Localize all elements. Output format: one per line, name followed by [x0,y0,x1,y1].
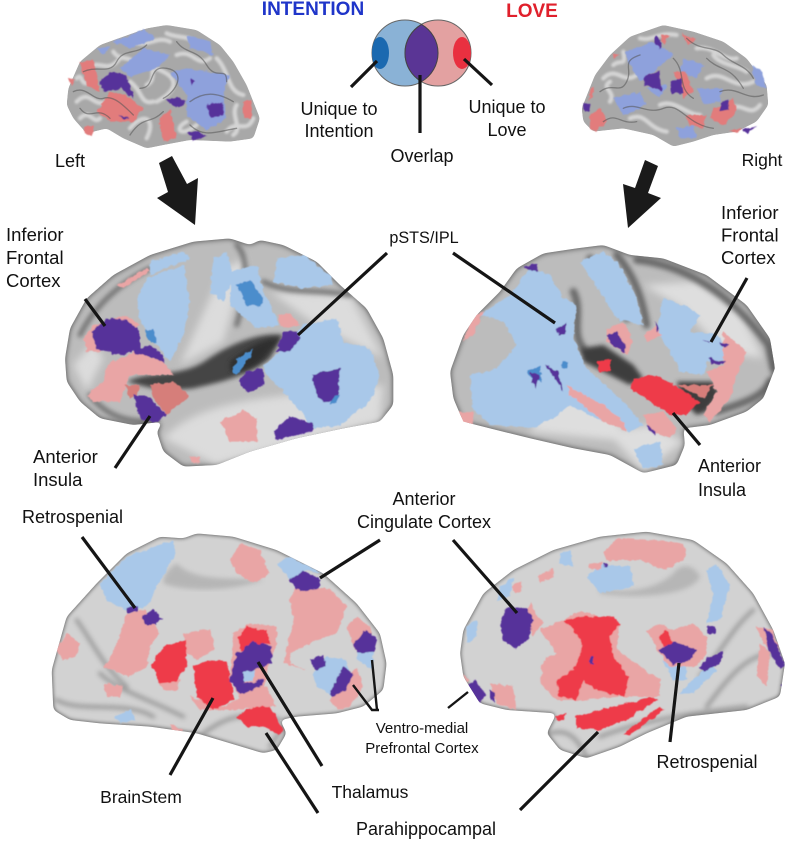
small brain: left [67,25,260,148]
label: inferior frontal cortex left: Cortex [6,270,61,291]
label: brainstem: BrainStem [100,787,182,807]
pointer: pSTS left [298,253,387,335]
label: thalamus: Thalamus [332,782,409,802]
heading: love: LOVE [506,1,558,22]
label: anterior insula left: Insula [33,469,83,490]
label: overlap: Overlap [390,146,454,166]
pointer: anterior cingulate left [320,540,380,578]
inflated brain: right medial [460,532,785,758]
label: parahippocampal: Parahippocampal [356,819,496,839]
pointer: anterior cingulate right [453,540,517,613]
label: unique to love: Love [487,120,527,140]
label: unique to intention: Intention [304,121,374,141]
shading: sulci [550,566,773,757]
shading: gyri and sulci [73,245,383,465]
pointer: retrospenial left [82,537,135,608]
pointer: parahippocampal right [520,732,598,810]
label: unique to love: Unique to [468,97,546,117]
pointer: vmPFC upper [372,660,377,710]
pointer: vmPFC right [448,692,468,708]
pointer: brainstem [170,698,213,775]
arrow: left [157,156,198,225]
pointer: anterior insula left [115,416,150,468]
label: unique to intention: Unique to [300,99,378,119]
inflated brain: left lateral [65,238,393,467]
pointer: parahippocampal left [266,733,318,813]
label: anterior insula left: Anterior [33,446,98,467]
inflated brain: right lateral [450,245,775,473]
label: inferior frontal cortex right: Inferior [721,202,779,223]
pointer: inferior frontal right [711,278,747,342]
pointer: pSTS right [453,253,555,323]
small brain: right [582,25,768,147]
pointer: vmPFC lower [353,685,379,710]
pointer: inferior frontal left [85,299,105,326]
shading: gyri and sulci [530,255,773,472]
label: anterior cingulate cortex: Cingulate Cortex [357,512,491,532]
label: anterior insula right: Anterior [698,456,761,476]
pointer: anterior insula right [673,413,700,445]
venn pointer: overlap [418,75,422,133]
venn pointer: unique to love [464,59,492,85]
label: retrospenial left: Retrospenial [22,507,123,527]
label: retrospenial right: Retrospenial [656,752,758,772]
label: anterior cingulate cortex: Anterior [392,489,456,509]
label: pSTS/IPL: pSTS/IPL [389,229,459,247]
label: inferior frontal cortex left: Inferior [6,224,64,245]
label: inferior frontal cortex right: Cortex [721,247,776,268]
label: inferior frontal cortex left: Frontal [6,247,64,268]
label: left: Left [55,151,85,171]
inflated brain: left medial [52,533,387,753]
pointer: thalamus [258,662,322,766]
label: ventro-medial prefrontal cortex: Ventro-medial [376,720,468,737]
label: anterior insula right: Insula [698,480,747,500]
venn diagram [371,20,471,86]
label: ventro-medial prefrontal cortex: Prefrontal Cortex [365,740,479,757]
arrow: right [623,160,661,228]
label: inferior frontal cortex right: Frontal [721,224,779,246]
shading: sulci [57,563,283,747]
venn pointer: unique to intention [351,61,377,87]
label: right: Right [742,150,783,170]
pointer: retrospenial right [670,663,679,742]
